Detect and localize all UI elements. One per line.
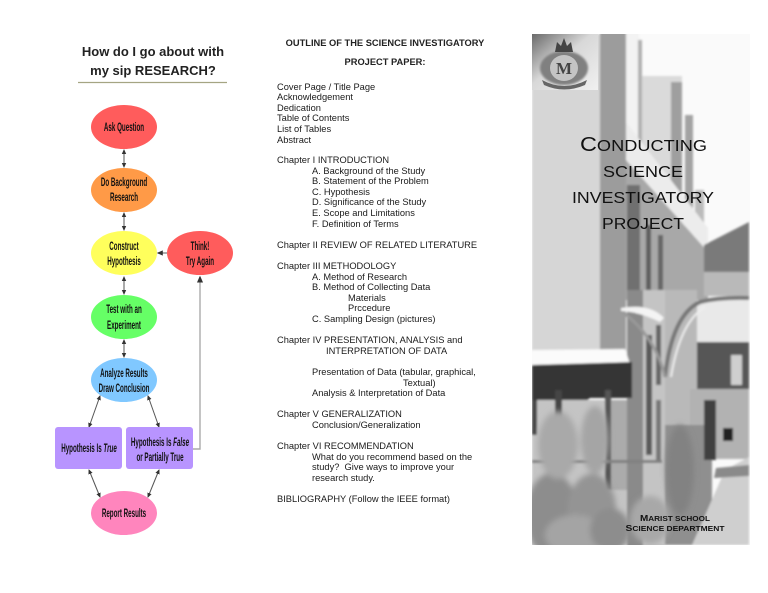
node: hypothesis is false: or Partially True [136,451,184,465]
node: think try again: Think! [191,240,209,254]
text block: chapter III: Chapter III METHODOLOGY [277,261,396,271]
text block: chapter II: Chapter II REVIEW OF RELATED LITERATURE [277,240,477,250]
node: construct hypothesis [91,231,157,275]
text block: chapter III: A. Method of Research [312,272,407,282]
text block: chapter IV: Analysis & Interpretation of Data [312,388,445,398]
node: hypothesis is true [55,427,122,469]
cover footer: SCIENCE DEPARTMENT [626,523,725,533]
heading: research question: my sip RESEARCH? [90,62,216,78]
cover title: PROJECT [602,216,684,233]
node: analyze results: Analyze Results [100,367,148,381]
cover photograph [526,30,750,557]
text block: chapter VI: study? Give ways to improve your [312,462,454,472]
cover title: SCIENCE [603,164,683,181]
node: background research [91,168,157,212]
cover title: INVESTIGATORY [572,190,714,207]
node: background research: Research [110,191,138,205]
node: report results: Report Results [102,507,146,521]
text block: front matter: Dedication [277,102,321,112]
cover footer: MARIST SCHOOL [640,513,711,523]
node: report results [91,491,157,535]
text block: chapter I: D. Significance of the Study [312,197,426,207]
node: hypothesis is false: Hypothesis Is False [131,436,190,450]
node: test with an experiment: Test with an [106,303,142,317]
text block: front matter: Table of Contents [277,113,349,123]
text block: chapter I: E. Scope and Limitations [312,208,415,218]
text block: chapter I [277,155,429,228]
node: hypothesis is true: Hypothesis Is True [61,442,117,456]
text block: chapter III: Prccedure [348,303,390,313]
node: analyze results: Draw Conclusion [99,382,150,396]
text block: chapter IV: INTERPRETATION OF DATA [326,346,447,356]
node: construct hypothesis: Construct [109,240,139,254]
text block: chapter I: C. Hypothesis [312,186,370,196]
node: construct hypothesis: Hypothesis [107,255,141,269]
text block: chapter I: F. Definition of Terms [312,218,399,228]
text block: chapter I: A. Background of the Study [312,166,425,176]
text block: chapter VI [277,441,472,483]
text block: front matter: Acknowledgement [277,92,353,102]
text block: front matter [277,82,375,144]
heading: research question: How do I go about with [82,44,224,59]
node: test with an experiment: Experiment [107,319,141,333]
text block: chapter VI: Chapter VI RECOMMENDATION [277,441,414,451]
text block: chapter VI: What do you recommend based on the [312,452,472,462]
text block: chapter I: B. Statement of the Problem [312,176,429,186]
cover title: CONDUCTING [580,134,707,156]
text block: chapter IV: Chapter IV PRESENTATION, ANALYSIS and [277,335,462,345]
cover title [572,134,714,233]
text block: chapter V: Conclusion/Generalization [312,420,421,430]
heading: research question [82,44,224,78]
node: ask question [91,105,157,149]
text block: chapter III: B. Method of Collecting Data [312,282,430,292]
text block: chapter III [277,261,436,324]
text block: chapter VI: research study. [312,472,375,482]
text block: front matter: List of Tables [277,124,331,134]
text block: chapter IV: Presentation of Data (tabular, graphical, [312,367,476,377]
text block: chapter V: Chapter V GENERALIZATION [277,409,402,419]
node: ask question: Ask Question [104,121,144,135]
text block: front matter: Abstract [277,134,311,144]
image: school crest [532,34,598,90]
node: think try again [167,231,233,275]
text block: chapter V [277,409,421,430]
flowchart: scientific method [55,82,233,535]
text block: front matter: Cover Page / Title Page [277,82,375,92]
cover footer [626,513,725,533]
panel: cover with photo [532,34,750,545]
image: school crest: M [556,59,572,78]
node: analyze results [91,358,157,402]
text block: chapter IV [277,335,476,398]
node: hypothesis is false [126,427,193,469]
text block: chapter I: Chapter I INTRODUCTION [277,155,389,165]
outline heading: OUTLINE OF THE SCIENCE INVESTIGATORY [286,38,484,48]
node: think try again: Try Again [186,255,214,269]
text block: chapter IV: Textual) [403,378,436,388]
node: test with an experiment [91,295,157,339]
text block: chapter III: C. Sampling Design (pictures) [312,314,436,324]
node: background research: Do Background [101,176,147,190]
subheading: project paper: PROJECT PAPER: [345,57,425,67]
text block: chapter III: Materials [348,292,386,302]
text block: bibliography: BIBLIOGRAPHY (Follow the IEEE format) [277,494,450,504]
